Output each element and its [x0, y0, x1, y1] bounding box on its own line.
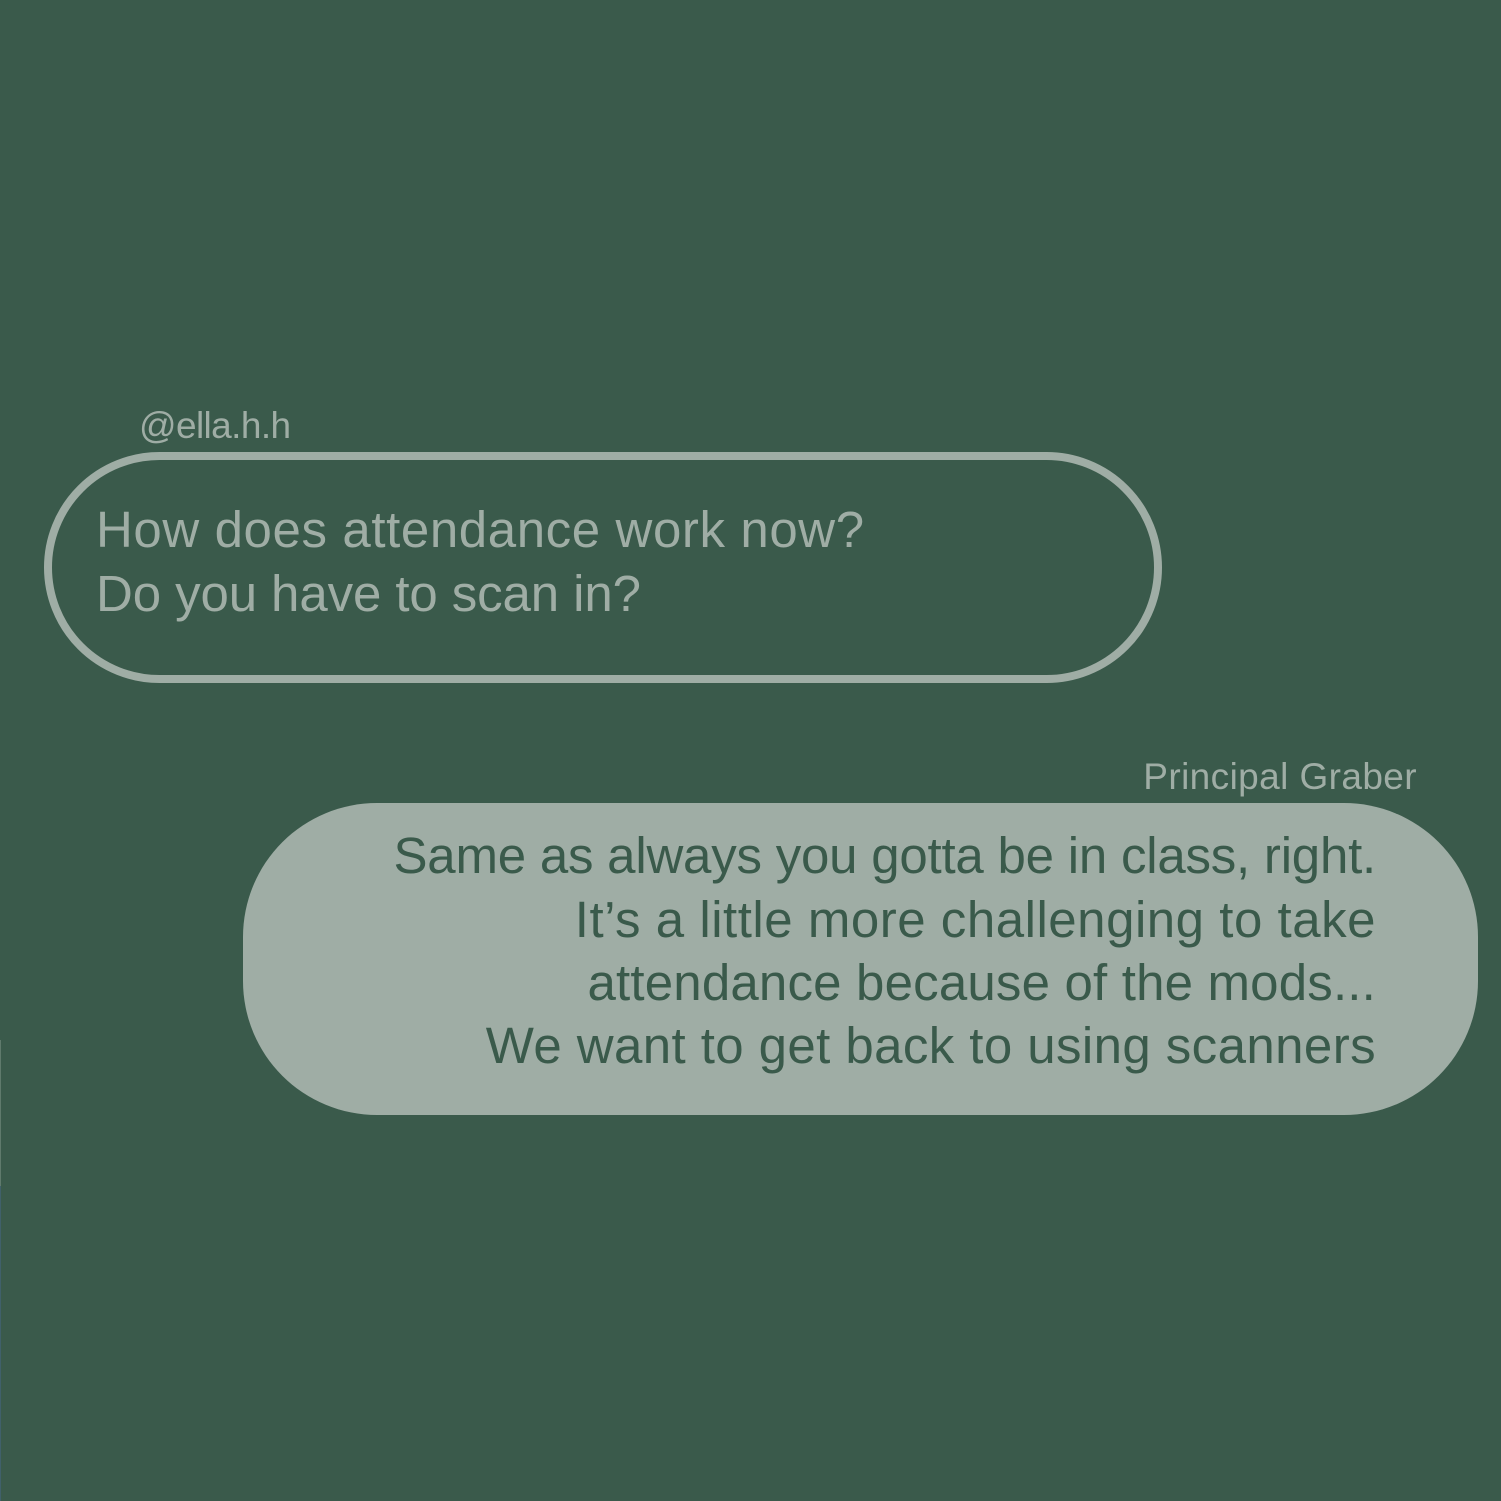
- question text: Do you have to scan in?: [96, 565, 641, 622]
- answer text: We want to get back to using scanners: [486, 1016, 1376, 1074]
- answer text: Same as always you gotta be in class, right.: [394, 827, 1376, 884]
- question text: [96, 501, 865, 622]
- answer text: It’s a little more challenging to take: [575, 890, 1376, 948]
- question text: How does attendance work now?: [96, 501, 865, 558]
- handle: @ella.h.h: @ella.h.h: [139, 405, 290, 446]
- answer text: [394, 827, 1376, 1074]
- filled answer bubble: [243, 803, 1478, 1115]
- answer text: attendance because of the mods...: [588, 954, 1376, 1011]
- name: Principal Graber: Principal Graber: [1143, 756, 1417, 797]
- outlined question bubble: [44, 452, 1162, 683]
